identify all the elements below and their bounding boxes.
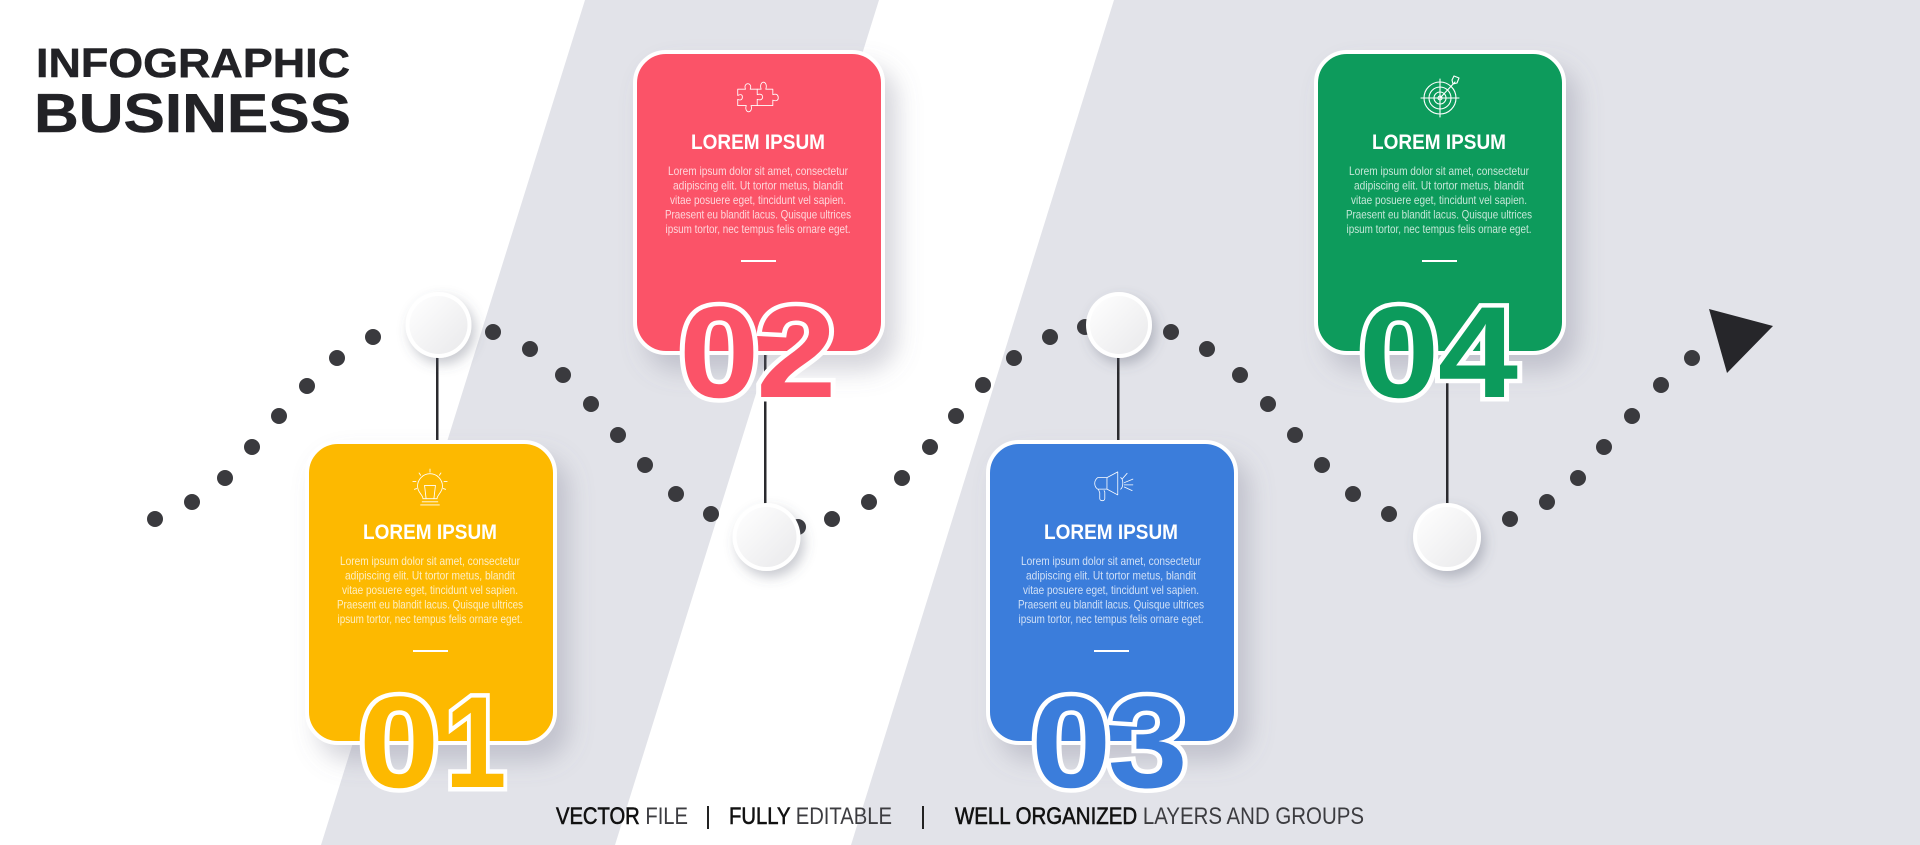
body text: vitae posuere eget, tincidunt vel sapien.: [1351, 193, 1527, 207]
heading: LOREM IPSUM: [1372, 131, 1506, 154]
panel: step 03: [988, 442, 1236, 815]
number 04: 04: [1359, 281, 1518, 425]
title: INFOGRAPHIC: [36, 40, 350, 86]
heading: LOREM IPSUM: [691, 131, 825, 154]
body text: adipiscing elit. Ut tortor metus, blandit: [1026, 568, 1197, 582]
title: BUSINESS: [34, 82, 351, 144]
connector line 4: [1446, 372, 1448, 508]
node 3: [1086, 292, 1152, 358]
heading: LOREM IPSUM: [363, 521, 497, 544]
number 01: [359, 670, 506, 815]
body text: Lorem ipsum dolor sit amet, consectetur: [340, 554, 520, 568]
node 4: [1413, 503, 1481, 571]
body text: [1346, 164, 1532, 236]
body text: ipsum tortor, nec tempus felis ornare eget.: [338, 612, 522, 626]
icon: puzzle: [738, 82, 778, 112]
number 03: 03: [1031, 671, 1188, 815]
body text: Praesent eu blandit lacus. Quisque ultrices: [337, 598, 523, 612]
body text: Praesent eu blandit lacus. Quisque ultrices: [1346, 208, 1532, 222]
node 2: [732, 503, 800, 571]
body text: Praesent eu blandit lacus. Quisque ultrices: [665, 208, 851, 222]
body text: ipsum tortor, nec tempus felis ornare eget.: [1346, 222, 1532, 236]
footer caption: [556, 803, 1364, 830]
number 02: 02: [679, 281, 836, 425]
panel: step 02: [635, 52, 883, 425]
body text: ipsum tortor, nec tempus felis ornare eget.: [666, 222, 850, 236]
body text: [665, 164, 851, 236]
heading: LOREM IPSUM: [1044, 521, 1178, 544]
body text: Praesent eu blandit lacus. Quisque ultrices: [1018, 598, 1204, 612]
body text: adipiscing elit. Ut tortor metus, blandit: [1354, 178, 1525, 192]
body text: adipiscing elit. Ut tortor metus, blandit: [673, 178, 844, 192]
body text: Lorem ipsum dolor sit amet, consectetur: [668, 164, 848, 178]
number 01: 1: [445, 670, 506, 815]
node 1: [406, 292, 472, 358]
body text: Lorem ipsum dolor sit amet, consectetur: [1349, 164, 1529, 178]
panel: step 01: [307, 442, 555, 815]
body text: vitae posuere eget, tincidunt vel sapien.: [342, 583, 518, 597]
title: [34, 40, 351, 144]
connector line 1: [436, 350, 438, 442]
body text: [337, 554, 523, 626]
body text: ipsum tortor, nec tempus felis ornare eget.: [1018, 612, 1204, 626]
icon: target: [1421, 76, 1459, 117]
footer caption: VECTOR FILE: [556, 803, 688, 830]
dotted path: [147, 319, 1700, 535]
icon: light bulb: [413, 469, 447, 505]
body text: vitae posuere eget, tincidunt vel sapien.: [670, 193, 846, 207]
body text: vitae posuere eget, tincidunt vel sapien.: [1023, 583, 1199, 597]
connector line 2: [764, 350, 766, 508]
body text: [1018, 554, 1204, 626]
footer caption: WELL ORGANIZED LAYERS AND GROUPS: [955, 803, 1364, 830]
number 01: 0: [359, 671, 439, 815]
footer caption: FULLY EDITABLE: [729, 803, 892, 830]
icon: megaphone: [1095, 472, 1133, 501]
connector line 3: [1117, 350, 1120, 442]
body text: adipiscing elit. Ut tortor metus, blandit: [345, 568, 516, 582]
arrow head: [1709, 309, 1773, 373]
panel: step 04: [1316, 52, 1564, 425]
body text: Lorem ipsum dolor sit amet, consectetur: [1021, 554, 1201, 568]
